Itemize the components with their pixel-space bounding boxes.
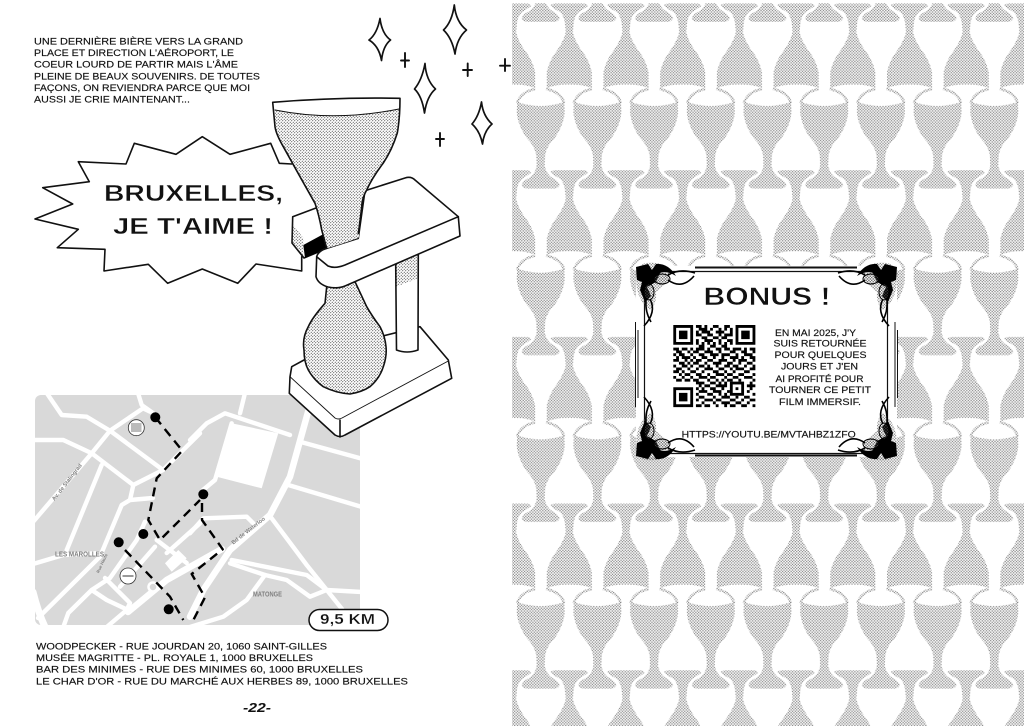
bonus text: JOURS ET J'EN [781,362,858,372]
text block: intro: COEUR LOURD DE PARTIR MAIS L'ÂME [34,60,238,71]
map white blocks [165,423,278,572]
text block: intro: PLACE ET DIRECTION L'AÉROPORT, LE [34,48,234,59]
stand column [396,252,418,352]
text block: intro: UNE DERNIÈRE BIÈRE VERS LA GRAND [34,36,243,48]
panel frame lines [636,268,898,456]
bonus heading: BONUS ! [704,283,830,311]
text block: intro: PLEINE DE BEAUX SOUVENIRS. DE TOUTES [34,71,260,82]
bonus text: TOURNER CE PETIT [769,385,872,395]
map labels: MATONGE [253,592,282,599]
map stops [114,412,208,614]
glass bulb [304,282,386,394]
map labels: Bd de Waterloo [231,516,267,546]
text block: intro: FAÇONS, ON REVIENDRA PARCE QUE MOI [34,83,250,94]
map [33,393,362,627]
map labels: LES MAROLLES [55,550,104,558]
QR code [673,325,755,407]
text block: intro: AUSSI JE CRIE MAINTENANT... [34,95,190,106]
map labels [51,463,282,599]
bonus text: FILM IMMERSIF. [779,397,861,407]
page number: -22- [243,700,271,715]
map route dashed [125,417,223,623]
bonus text: SUIS RETOURNÉE [774,338,866,348]
address list: LE CHAR D'OR - RUE DU MARCHÉ AUX HERBES 89, 1000 BRUXELLES [36,676,408,687]
bonus link: HTTPS://YOUTU.BE/MVTAHBZ1ZFO [682,429,856,439]
address list [36,641,408,687]
address list: MUSÉE MAGRITTE - PL. ROYALE 1, 1000 BRUXELLES [36,653,313,664]
panel: bonus [636,263,898,460]
text block: intro [34,36,260,106]
heading: burst text: JE T'AIME ! [113,213,273,239]
address list: WOODPECKER - RUE JOURDAN 20, 1060 SAINT-GILLES [36,641,327,652]
illustration: kwak glass in wooden stand [273,98,460,437]
bonus text: EN MAI 2025, J'Y [775,328,856,338]
heading: burst text: BRUXELLES, [104,180,283,206]
address list: BAR DES MINIMES - RUE DES MINIMES 60, 1000 BRUXELLES [36,665,363,676]
bonus text [769,328,872,407]
stand plate [316,177,460,288]
distance badge [309,610,388,630]
heading: burst text [104,180,283,239]
stand base [289,327,452,437]
map labels: Av. de Stalingrad [51,463,84,502]
map landmark icons [120,420,144,584]
bonus text: POUR QUELQUES [774,350,866,360]
panel corner ornaments [636,263,897,460]
glass upper [273,98,400,248]
map labels: Rue Haute [95,552,109,574]
map streets [33,393,362,627]
stand side block [292,208,328,258]
distance badge: 9,5 KM [320,612,375,628]
bonus text: AI PROFITÉ POUR [776,374,864,384]
background pattern: kwak glasses [512,3,1024,726]
speech burst [35,137,302,283]
icon: sparkle stars and plus signs [369,5,510,146]
